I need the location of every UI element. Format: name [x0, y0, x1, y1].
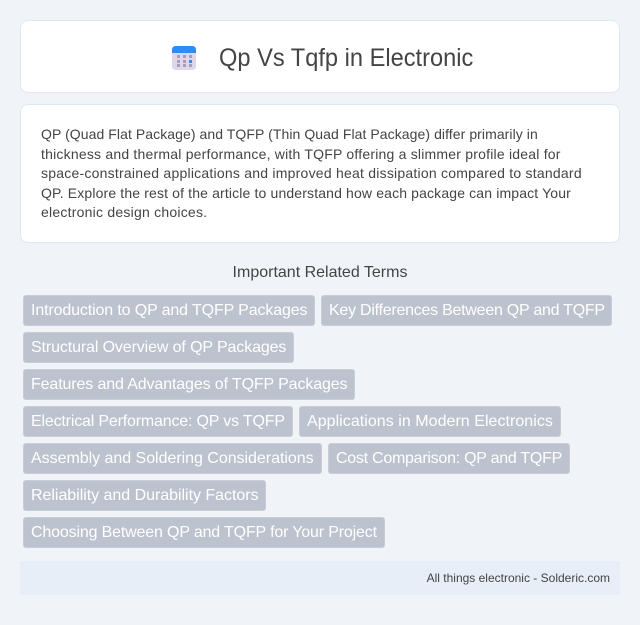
tag: Reliability and Durability Factors	[31, 487, 259, 504]
panel: title card	[20, 20, 620, 93]
tag	[23, 517, 385, 548]
heading: related terms: Important Related Terms	[233, 264, 407, 281]
text block: intro: QP. Explore the rest of the article to understand how each package can impact Your	[41, 185, 571, 201]
tag	[23, 443, 322, 474]
panel: intro card	[20, 104, 620, 243]
tag: Introduction to QP and TQFP Packages	[31, 302, 307, 319]
tag: Cost Comparison: QP and TQFP	[336, 450, 562, 467]
tag: Structural Overview of QP Packages	[31, 339, 286, 356]
tag	[321, 295, 612, 326]
text block: intro: electronic design choices.	[41, 204, 207, 220]
tag	[328, 443, 570, 474]
text block: intro: QP (Quad Flat Package) and TQFP (Thin Quad Flat Package) differ primarily in	[41, 126, 538, 142]
tag: Key Differences Between QP and TQFP	[329, 302, 605, 319]
panel: related term tags	[23, 295, 612, 548]
icon: calendar	[172, 46, 196, 70]
text block: intro	[41, 126, 582, 220]
text block: intro: space-constrained applications and improved heat dissipation compared to standard	[41, 165, 582, 181]
footer: All things electronic - Solderic.com	[427, 571, 610, 585]
tag	[23, 406, 293, 437]
tag	[23, 332, 294, 363]
footer	[20, 561, 620, 595]
tag: Electrical Performance: QP vs TQFP	[31, 413, 285, 430]
text block: intro: thickness and thermal performance, with TQFP offering a slimmer profile ideal for	[41, 146, 561, 162]
tag: Assembly and Soldering Considerations	[31, 450, 314, 467]
tag	[23, 480, 266, 511]
tag: Features and Advantages of TQFP Packages	[31, 376, 347, 393]
tag: Applications in Modern Electronics	[307, 413, 553, 430]
tag	[23, 295, 315, 326]
tag	[23, 369, 355, 400]
title: Qp Vs Tqfp in Electronic	[219, 44, 473, 72]
tag	[299, 406, 561, 437]
tag: Choosing Between QP and TQFP for Your Project	[31, 524, 377, 541]
